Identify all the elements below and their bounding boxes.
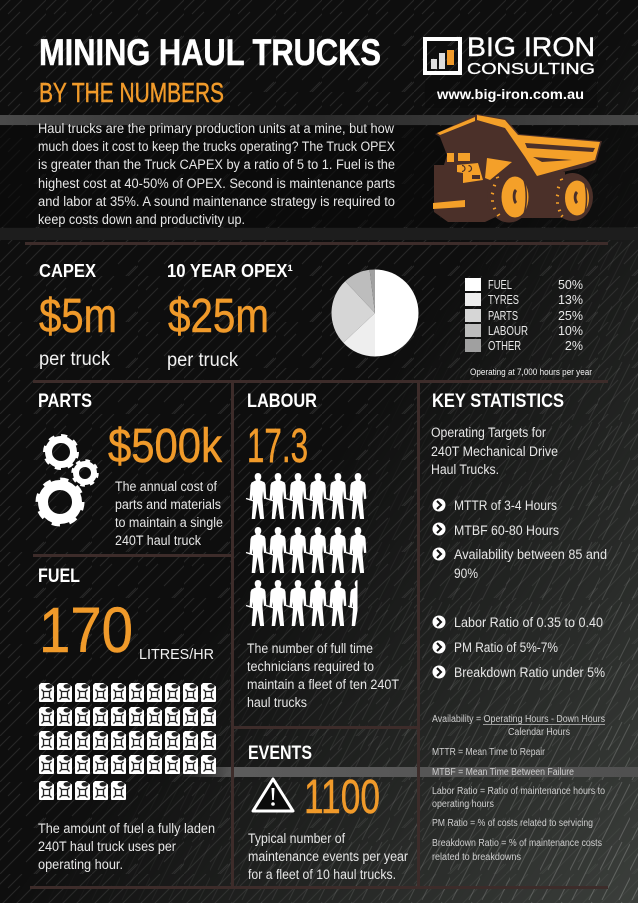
bullet list: targets: 90%: [454, 566, 478, 581]
pie legend: FUEL: [488, 278, 512, 292]
panel: key statistics: KEY STATISTICS: [432, 391, 564, 412]
intro paragraph: [38, 121, 395, 227]
bullet list: targets: Breakdown Ratio under 5%: [454, 665, 605, 680]
website url: www.big-iron.com.au: [436, 87, 584, 102]
panel: fuel: [38, 566, 216, 872]
definitions: PM Ratio = % of costs related to servicing: [432, 818, 593, 829]
panel: key statistics: Haul Trucks.: [431, 462, 499, 477]
panel: events: 1100: [304, 771, 380, 824]
panel: labour: LABOUR: [247, 391, 317, 412]
intro paragraph: much does it cost to keep the trucks operating? The Truck OPEX: [38, 139, 395, 154]
intro paragraph: Haul trucks are the primary production units at a mine, but how: [38, 121, 394, 136]
panel: fuel: operating hour.: [38, 857, 123, 872]
stat: 10 year opex: [167, 261, 293, 371]
panel: events: for a fleet of 10 haul trucks.: [248, 867, 396, 882]
stat: 10 year opex: per truck: [167, 350, 238, 371]
panel: events: EVENTS: [248, 743, 312, 764]
pie chart: opex breakdown: [331, 269, 418, 356]
definitions: Calendar Hours: [508, 727, 570, 738]
panel: labour: [246, 391, 399, 710]
pie legend: 10%: [558, 324, 583, 338]
website url: [425, 80, 597, 108]
pie legend: 2%: [565, 339, 583, 353]
panel: labour: 17.3: [247, 420, 308, 473]
stat: capex: per truck: [39, 349, 110, 370]
panel: parts: 240T haul truck: [115, 533, 201, 548]
panel: labour: maintain a fleet of ten 240T: [247, 677, 399, 692]
definitions: operating hours: [432, 799, 494, 810]
subtitle: BY THE NUMBERS: [39, 77, 224, 108]
bullet list: targets: MTTR of 3-4 Hours: [454, 498, 557, 513]
icon: haul truck: [433, 114, 602, 222]
logo: Big Iron Consulting: BIG IRON: [467, 32, 595, 62]
pie legend: OTHER: [488, 339, 521, 353]
icon: technician figures: [246, 473, 366, 626]
logo: Big Iron Consulting: CONSULTING: [467, 61, 595, 78]
definitions: MTBF = Mean Time Between Failure: [432, 767, 574, 778]
definitions: related to breakdowns: [432, 852, 521, 863]
pie legend: 50%: [558, 278, 583, 292]
panel: parts: PARTS: [38, 391, 92, 412]
panel: parts: [38, 391, 223, 548]
stat: 10 year opex: 10 YEAR OPEX¹: [167, 261, 293, 281]
intro paragraph: highest cost at 40-50% of OPEX. Second is maintenance parts: [38, 176, 395, 191]
panel: labour: haul trucks: [247, 695, 307, 710]
panel: fuel: FUEL: [38, 566, 80, 587]
bullet list: targets: Availability between 85 and: [454, 547, 607, 562]
pie legend: PARTS: [488, 309, 518, 323]
bullet list: targets: PM Ratio of 5%-7%: [454, 640, 558, 655]
intro paragraph: is greater than the Truck CAPEX by a ratio of 5 to 1. Fuel is the: [38, 157, 395, 172]
panel: parts: The annual cost of: [115, 479, 217, 494]
logo: Big Iron Consulting: [425, 32, 595, 78]
definitions: Labor Ratio = Ratio of maintenance hours to: [432, 786, 605, 797]
intro paragraph: keep costs down and productivity up.: [38, 212, 245, 227]
definitions: MTTR = Mean Time to Repair: [432, 747, 546, 758]
panel: fuel: The amount of fuel a fully laden: [38, 821, 215, 836]
bullet list: targets: MTBF 60-80 Hours: [454, 523, 559, 538]
pie legend: 13%: [558, 293, 583, 307]
stat: capex: $5m: [39, 290, 117, 343]
panel: labour: The number of full time: [247, 641, 373, 656]
panel: parts: parts and materials: [115, 497, 221, 512]
icon: warning triangle: [253, 779, 293, 811]
definitions: Availability = Operating Hours - Down Hours: [432, 714, 605, 725]
icon: fuel cans: [39, 683, 216, 800]
pie legend: TYRES: [488, 293, 519, 307]
panel: parts: to maintain a single: [115, 515, 223, 530]
bullet list: targets: [432, 498, 607, 680]
panel: key statistics: 240T Mechanical Drive: [431, 444, 558, 459]
pie legend: LABOUR: [488, 324, 528, 338]
panel: parts: $500k: [108, 420, 223, 473]
definitions: Breakdown Ratio = % of maintenance costs: [432, 838, 602, 849]
panel: events: Typical number of: [248, 831, 345, 846]
bullet list: targets: Labor Ratio of 0.35 to 0.40: [454, 615, 603, 630]
icon: gears: [38, 436, 97, 524]
definitions: [432, 714, 605, 863]
stat: capex: [39, 261, 117, 370]
panel: fuel: 170: [39, 594, 133, 666]
panel: fuel: 240T haul truck uses per: [38, 839, 176, 854]
pie legend: [465, 278, 583, 353]
panel: key statistics: [431, 391, 607, 863]
panel: key statistics: Operating Targets for: [431, 425, 546, 440]
stat: 10 year opex: $25m: [168, 290, 269, 343]
panel: labour: technicians required to: [247, 659, 374, 674]
pie legend: 25%: [558, 309, 583, 323]
panel: events: [248, 743, 408, 882]
title: MINING HAUL TRUCKS: [39, 32, 381, 73]
panel: fuel: LITRES/HR: [139, 646, 214, 663]
panel: events: maintenance events per year: [248, 849, 408, 864]
chart note: Operating at 7,000 hours per year: [470, 367, 592, 377]
stat: capex: CAPEX: [39, 261, 96, 281]
intro paragraph: and labor at 35%. A sound maintenance strategy is required to: [38, 194, 395, 209]
